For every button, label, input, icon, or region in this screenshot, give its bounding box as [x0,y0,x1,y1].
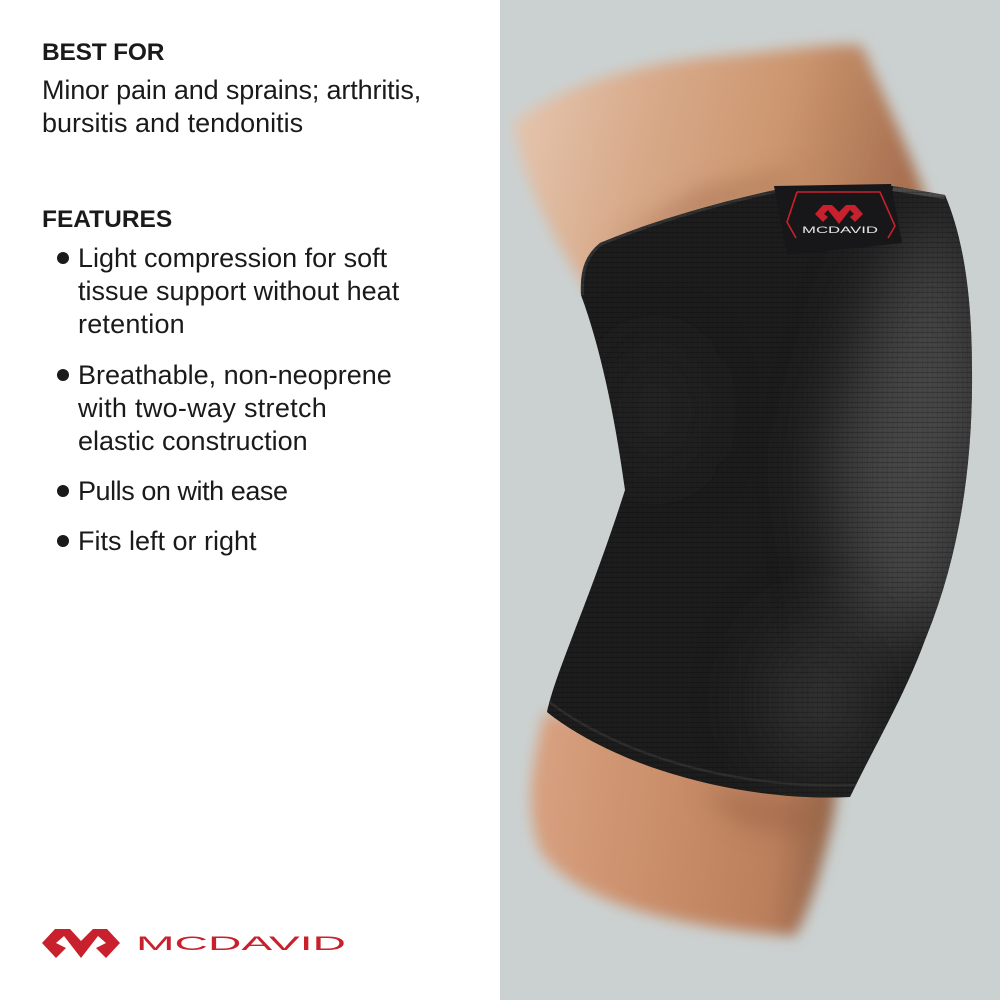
feature 2: with two-way stretch [78,393,327,423]
feature 2: Breathable, non-neoprene [78,360,392,390]
text block: best for description: Minor pain and sprains; arthritis, [42,75,421,105]
feature 3: Pulls on with ease [78,476,288,506]
bullets [57,252,69,547]
sleeve highlight [830,190,1000,650]
feature 1: tissue support without heat [78,276,399,306]
feature 1: retention [78,309,185,339]
text block: best for description [42,75,421,138]
feature 2: elastic construction [78,426,308,456]
label red frame [787,192,895,238]
text block: best for description: bursitis and tendonitis [42,108,303,138]
feature list [57,243,400,556]
label logo mark [815,205,863,224]
logo mark [42,929,120,958]
sleeve brand label [774,184,902,255]
panel: photo background [500,0,1000,1000]
feature 1: Light compression for soft [78,243,387,273]
logo wordmark: MCDAVID [136,934,346,955]
feature 1 [78,243,400,339]
feature 4: Fits left or right [78,526,257,556]
feature 2 [78,360,392,456]
lower leg [531,712,838,936]
heading: features: FEATURES [42,206,172,233]
black knee sleeve [547,186,972,798]
upper leg [514,45,928,310]
photo: knee wearing black sleeve [510,35,972,946]
label wordmark: MCDAVID [802,225,879,235]
sleeve top welt [581,190,775,295]
sleeve bottom hem [547,700,860,786]
heading: best for: BEST FOR [42,39,164,66]
logo: McDavid [42,929,346,958]
skin shadow near sleeve [600,170,830,840]
